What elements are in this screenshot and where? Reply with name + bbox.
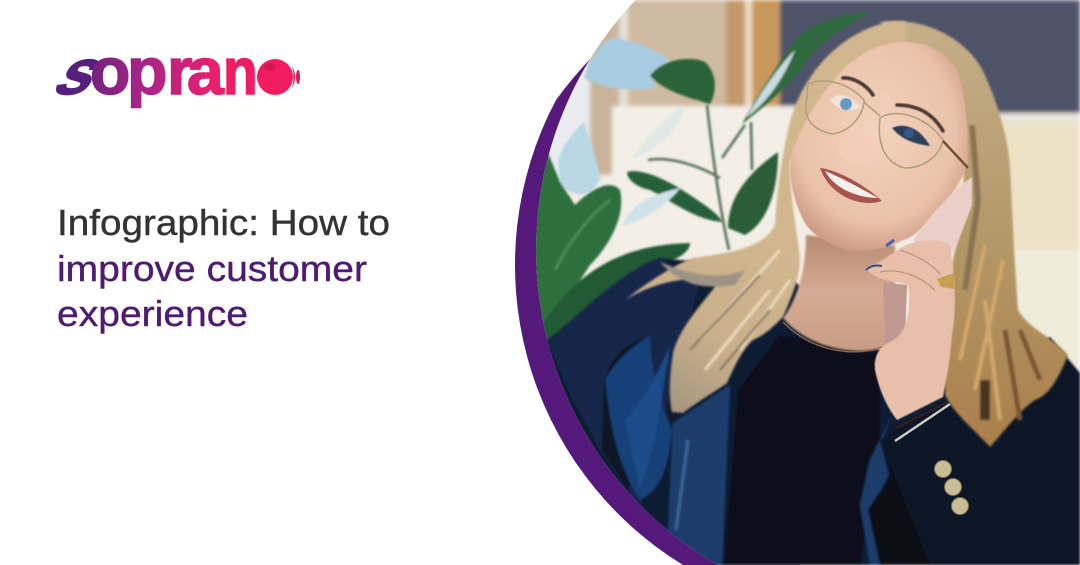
title: Infographic: How to <box>57 202 390 243</box>
neck <box>783 235 895 351</box>
necklace <box>783 322 882 352</box>
jacket <box>545 258 1080 565</box>
title: improve customer <box>57 248 367 289</box>
hair: left side <box>625 21 905 413</box>
title: experience <box>57 293 248 334</box>
eyebrows <box>843 78 943 131</box>
glasses <box>806 81 968 168</box>
eyes <box>830 95 930 146</box>
nose and mouth <box>820 168 882 203</box>
plant <box>530 13 870 345</box>
title <box>57 202 390 334</box>
icon: logo ball: o <box>257 93 258 95</box>
logo: soprano: s <box>41 36 122 108</box>
logo: soprano <box>41 34 300 109</box>
ring and bracelets <box>895 273 955 441</box>
logo: soprano: opra <box>90 34 225 108</box>
photo background: office wall <box>520 0 1080 565</box>
icon: logo ball <box>257 59 300 95</box>
purple crescent <box>515 57 800 565</box>
hair: right side <box>880 21 1068 447</box>
photo in circle <box>520 0 1080 565</box>
buttons <box>934 460 968 514</box>
face <box>790 42 968 251</box>
hand <box>866 240 955 420</box>
logo: soprano: n <box>223 35 258 109</box>
phone <box>913 176 972 252</box>
